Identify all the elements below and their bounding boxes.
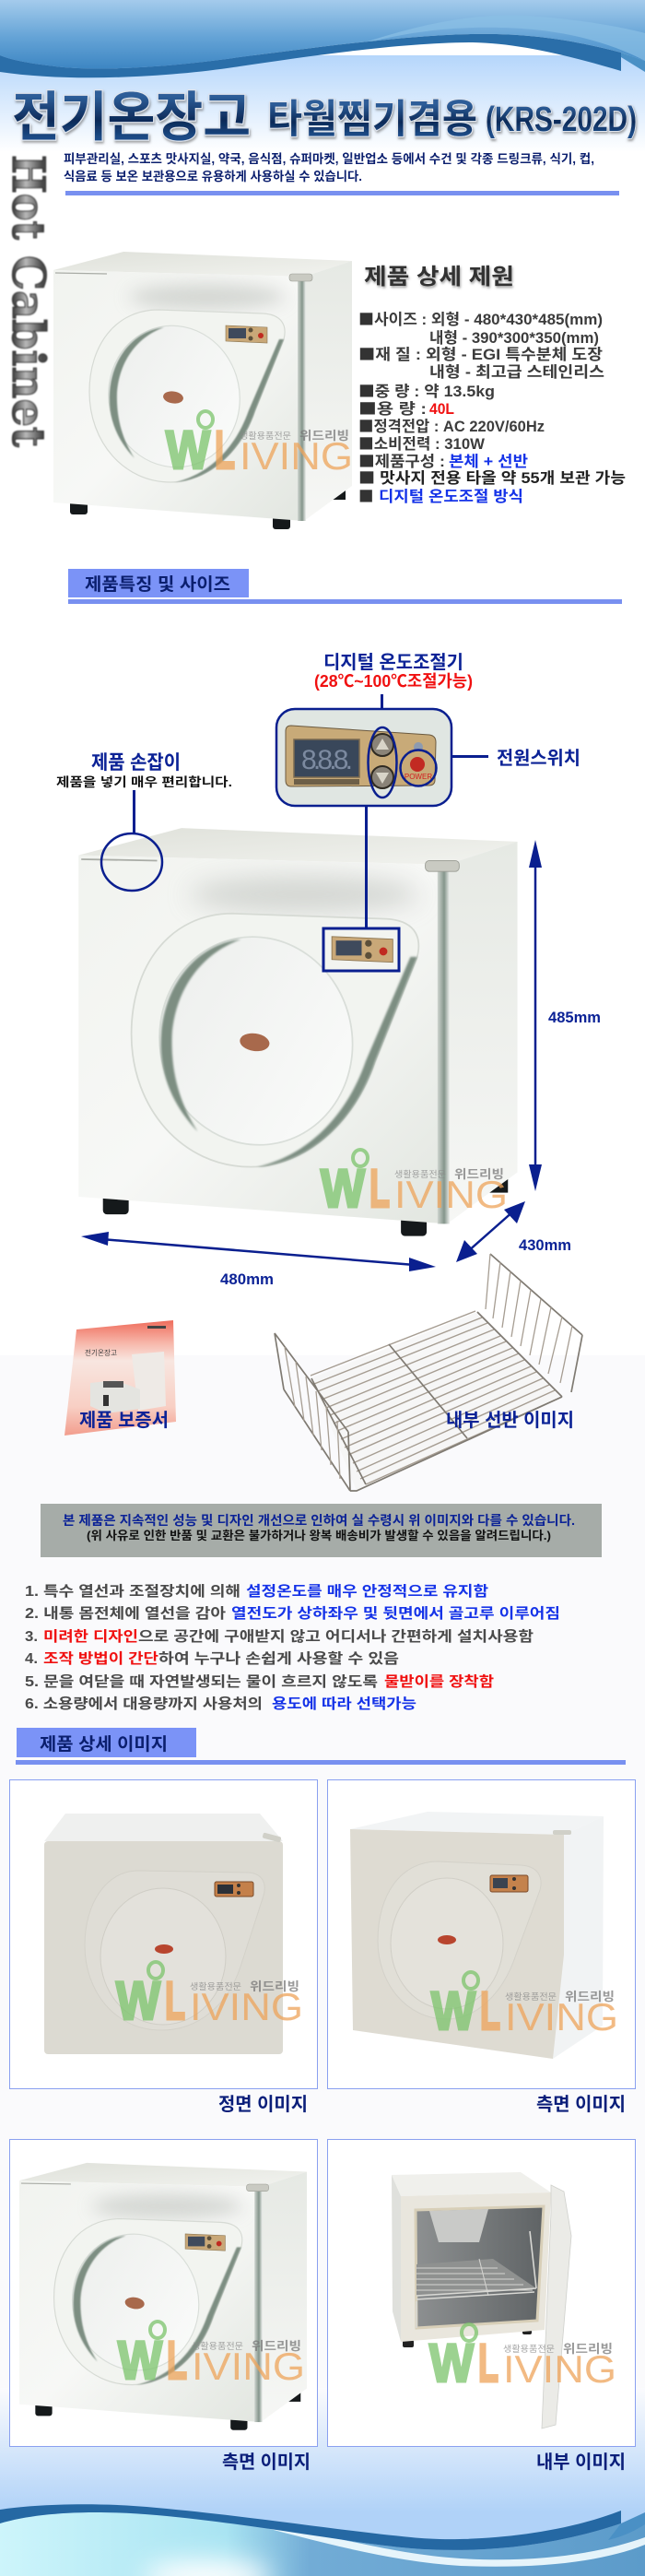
watermark: main photo: L xyxy=(215,420,235,480)
control panel close-up: 8.8.8. xyxy=(301,745,353,775)
title xyxy=(12,88,637,148)
watermark: main photo: 위드리빙 xyxy=(299,429,349,443)
watermark: interior image: W xyxy=(429,2334,474,2393)
panel: side image 2 xyxy=(9,2139,317,2447)
notice box: 본 제품은 지속적인 성능 및 디자인 개선으로 인하여 실 수령시 위 이미지와 다를 수 있습니다. xyxy=(63,1513,575,1528)
watermark: interior image xyxy=(429,2324,616,2393)
callout: digital temperature controller: 디지털 온도조절기 xyxy=(323,652,463,673)
watermark: front image: 위드리빙 xyxy=(250,1979,299,1993)
vertical heading: Hot Cabinet: Cabinet xyxy=(2,255,55,447)
watermark: interior image: L xyxy=(478,2334,498,2393)
callout: handle: 제품 손잡이 xyxy=(91,752,181,774)
feature list: 3. xyxy=(25,1629,38,1645)
panel: front image xyxy=(9,1779,317,2089)
watermark: main photo: 생활용품전문 xyxy=(240,431,291,442)
handle circle xyxy=(101,833,162,891)
feature list: 6. 소용량에서 대용량까지 사용처의 xyxy=(25,1696,263,1712)
watermark: main photo xyxy=(166,411,353,480)
intro text: 식음료 등 보온 보관용으로 유용하게 사용하실 수 있습니다. xyxy=(64,170,362,183)
specs list: ■중 량 : 약 13.5kg xyxy=(358,379,495,401)
watermark: interior image: IVING xyxy=(503,2347,616,2391)
callout: handle xyxy=(56,752,232,833)
watermark: interior image: 생활용품전문 xyxy=(503,2344,555,2355)
specs list: ■제품구성 : xyxy=(358,449,445,471)
specs list: 디지털 온도조절 방식 xyxy=(379,488,523,505)
watermark: main photo: W xyxy=(166,420,210,480)
feature list: 4. xyxy=(25,1651,38,1667)
feature list: 하여 누구나 손쉽게 사용할 수 있음 xyxy=(158,1650,399,1667)
title: 타월찜기겸용 xyxy=(267,98,477,142)
title: 전기온장고 xyxy=(12,88,251,148)
arrow: depth 430mm: 430mm xyxy=(519,1236,571,1254)
caption: front image: 정면 이미지 xyxy=(218,2094,308,2115)
feature list: 열전도가 상하좌우 및 뒷면에서 골고루 이루어짐 xyxy=(231,1605,560,1622)
specs list: 내형 - 최고급 스테인리스 xyxy=(429,363,604,381)
feature list: 조작 방법이 간단 xyxy=(43,1650,158,1667)
caption: side image 2: 측면 이미지 xyxy=(222,2452,311,2473)
watermark: side image 2: IVING xyxy=(192,2345,305,2388)
watermark: side image 2: W xyxy=(118,2331,162,2391)
warranty booklet: 제품 보증서 xyxy=(79,1410,169,1431)
watermark: side image: IVING xyxy=(505,1995,618,2038)
leader line and box around controller xyxy=(323,807,399,971)
watermark: front image: 생활용품전문 xyxy=(190,1981,241,1992)
callout: power switch xyxy=(452,748,580,769)
specs list: 40L xyxy=(429,401,454,418)
arrow: width 480mm xyxy=(81,1232,436,1288)
feature list: 으로 공간에 구애받지 않고 어디서나 간편하게 설치사용함 xyxy=(138,1628,534,1645)
section header: features and size xyxy=(68,569,622,604)
inner shelf rack xyxy=(275,1254,582,1491)
product photo: dimensioned xyxy=(78,828,518,1236)
control panel close-up: POWER xyxy=(405,773,432,781)
feature list: 설정온도를 매우 안정적으로 유지함 xyxy=(246,1583,488,1600)
notice box xyxy=(41,1504,602,1557)
warranty booklet xyxy=(64,1320,176,1436)
callout: handle: 제품을 넣기 매우 편리합니다. xyxy=(56,775,232,789)
watermark: dimensioned photo: 위드리빙 xyxy=(454,1167,504,1181)
specs list: ■용 량 : xyxy=(358,396,427,419)
arrow: height 485mm: 485mm xyxy=(548,1009,601,1026)
callout: digital temperature controller: (28℃~100℃조절가능) xyxy=(314,672,473,691)
arrow: height 485mm xyxy=(529,840,601,1191)
watermark: dimensioned photo: W xyxy=(321,1159,365,1219)
watermark: interior image: 위드리빙 xyxy=(563,2342,613,2356)
watermark: front image: IVING xyxy=(190,1985,303,2028)
watermark: side image: L xyxy=(480,1981,500,2041)
caption: side image: 측면 이미지 xyxy=(536,2094,626,2115)
specs list: ■ 맛사지 전용 타올 약 55개 보관 가능 xyxy=(358,466,626,488)
specs list: ■재 질 : 외형 - EGI 특수분체 도장 xyxy=(358,342,603,364)
watermark: main photo: IVING xyxy=(240,434,353,478)
section header: detail images: 제품 상세 이미지 xyxy=(40,1734,168,1755)
product photo: main xyxy=(53,252,352,529)
inner shelf rack: 내부 선반 이미지 xyxy=(446,1410,574,1431)
watermark: side image 2: 위드리빙 xyxy=(252,2339,301,2353)
arrow: width 480mm: 480mm xyxy=(220,1270,274,1288)
notice box: (위 사유로 인한 반품 및 교환은 불가하거나 왕복 배송비가 발생할 수 있음을 알려드립니다.) xyxy=(87,1529,551,1542)
specs list: ■소비전력 : 310W xyxy=(358,431,485,454)
feature list: 1. 특수 열선과 조절장치에 의해 xyxy=(25,1583,240,1600)
feature list xyxy=(25,1583,560,1712)
callout: digital temperature controller xyxy=(314,652,473,729)
specs list: 내형 - 390*300*350(mm) xyxy=(429,329,599,347)
feature list: 2. 내통 몸전체에 열선을 감아 xyxy=(25,1605,226,1622)
feature list: 5. 문을 여닫을 때 자연발생되는 물이 흐르지 않도록 xyxy=(25,1673,378,1690)
feature list: 용도에 따라 선택가능 xyxy=(272,1696,416,1712)
callout: power switch: 전원스위치 xyxy=(497,748,580,769)
watermark: side image: W xyxy=(431,1981,475,2041)
bottom wave xyxy=(0,2504,645,2576)
watermark: front image: W xyxy=(116,1971,160,2031)
watermark: dimensioned photo: L xyxy=(369,1159,390,1219)
watermark: side image xyxy=(431,1972,618,2041)
panel: interior image xyxy=(328,2139,636,2447)
vertical heading: Hot Cabinet: Hot xyxy=(2,155,55,240)
watermark: front image: L xyxy=(165,1971,185,2031)
caption: interior image: 내부 이미지 xyxy=(536,2452,626,2473)
header wave xyxy=(0,0,645,77)
specs list: 본체 + 선반 xyxy=(449,453,528,470)
watermark: dimensioned photo: IVING xyxy=(394,1173,508,1216)
control panel close-up xyxy=(276,709,452,806)
watermark: side image: 생활용품전문 xyxy=(505,1991,557,2003)
feature list: 미려한 디자인 xyxy=(43,1628,138,1645)
vertical heading: Hot Cabinet xyxy=(2,155,55,447)
intro text xyxy=(64,152,594,183)
watermark: side image 2: 생활용품전문 xyxy=(192,2341,243,2352)
watermark: dimensioned photo: 생활용품전문 xyxy=(394,1169,446,1180)
watermark: side image 2 xyxy=(118,2322,305,2391)
watermark: front image xyxy=(116,1962,303,2031)
watermark: side image: 위드리빙 xyxy=(565,1990,615,2003)
section header: detail images xyxy=(16,1728,626,1765)
intro divider xyxy=(65,191,619,195)
specs heading: 제품 상세 제원 xyxy=(364,265,514,290)
intro text: 피부관리실, 스포츠 맛사지실, 약국, 음식점, 슈퍼마켓, 일반업소 등에서 수건 및 각종 드링크류, 식기, 컵, xyxy=(64,152,594,166)
specs list: ■ xyxy=(358,484,374,506)
specs list xyxy=(358,307,626,506)
feature list: 물받이를 장착함 xyxy=(384,1673,494,1690)
arrow: depth 430mm xyxy=(456,1201,571,1262)
specs list: ■사이즈 : 외형 - 480*430*485(mm) xyxy=(358,307,603,329)
watermark: side image 2: L xyxy=(167,2331,187,2391)
watermark: dimensioned photo xyxy=(321,1150,508,1219)
section header: features and size: 제품특징 및 사이즈 xyxy=(85,574,230,595)
specs list: ■정격전압 : AC 220V/60Hz xyxy=(358,414,545,436)
panel: side image xyxy=(328,1779,636,2089)
warranty booklet: 전기온장고 xyxy=(85,1348,117,1357)
